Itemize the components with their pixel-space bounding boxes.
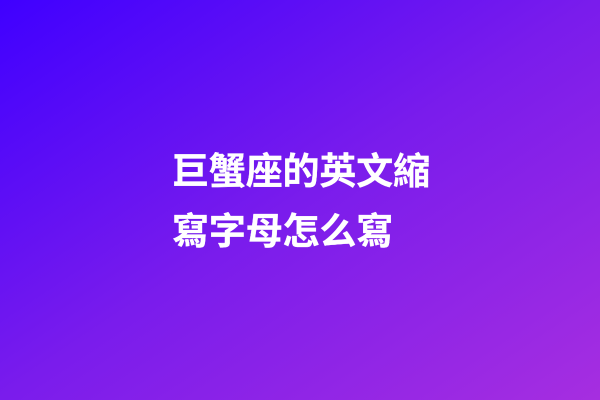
title line 2: 寫字母怎么寫	[172, 211, 393, 252]
title line 1: 巨蟹座的英文縮	[172, 151, 430, 192]
